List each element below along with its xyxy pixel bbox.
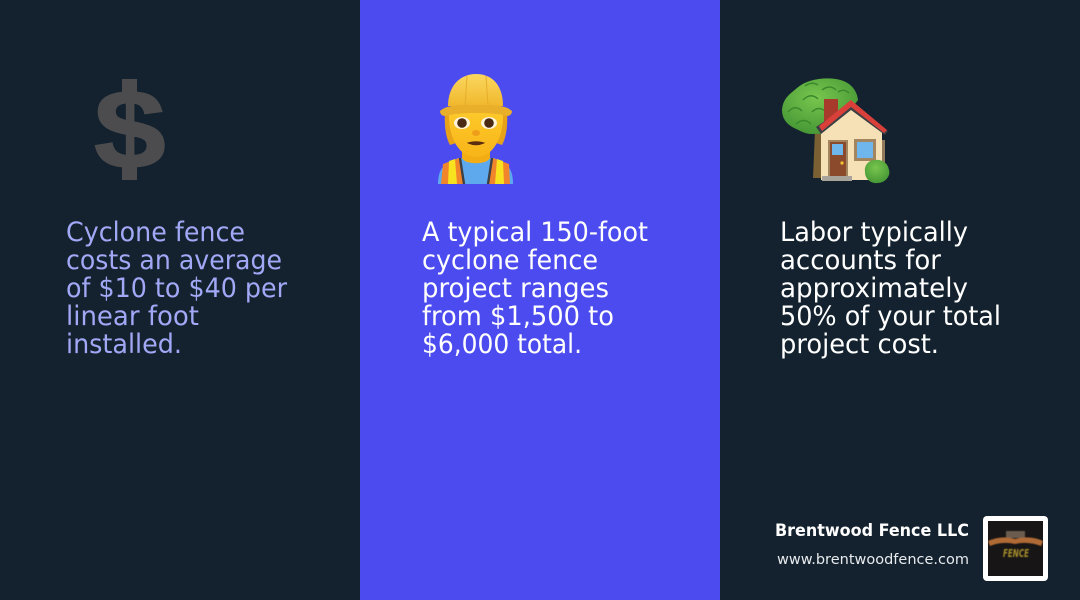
text block: average cost per foot: [66, 217, 287, 360]
worker body: [438, 158, 513, 184]
logo: FENCE: [1003, 547, 1029, 560]
door: [828, 140, 848, 177]
roof: [816, 103, 851, 134]
icon: dollar sign: $: [94, 67, 166, 192]
icon: construction worker: [438, 74, 513, 184]
logo: [983, 516, 1048, 581]
chimney: [824, 99, 838, 122]
website: www.brentwoodfence.com: [777, 552, 969, 568]
text block: project range: $6,000 total.: [422, 329, 582, 360]
text block: average cost per foot: Cyclone fence: [66, 217, 245, 248]
brand name: Brentwood Fence LLC: [775, 521, 969, 540]
text block: labor share: project cost.: [780, 329, 939, 360]
text block: project range: [422, 217, 648, 360]
house wall: [821, 107, 882, 180]
text block: labor share: accounts for: [780, 245, 941, 276]
panel: middle background: [360, 0, 720, 600]
text block: project range: cyclone fence: [422, 245, 598, 276]
bush: [865, 160, 889, 183]
text block: labor share: Labor typically: [780, 217, 968, 248]
text block: average cost per foot: installed.: [66, 329, 182, 360]
worker eyes: [454, 117, 470, 129]
steps: [822, 176, 852, 181]
tree trunk: [813, 130, 823, 178]
text block: average cost per foot: costs an average: [66, 245, 282, 276]
worker vest: [441, 158, 510, 184]
text block: project range: A typical 150-foot: [422, 217, 648, 248]
text block: average cost per foot: of $10 to $40 per: [66, 273, 287, 304]
worker nose and mouth: [472, 130, 480, 136]
worker neck: [462, 150, 490, 163]
text block: labor share: approximately: [780, 273, 968, 304]
window: [854, 139, 876, 161]
worker hair: [445, 112, 507, 145]
icon: house with tree: [782, 78, 889, 183]
text block: labor share: 50% of your total: [780, 301, 1001, 332]
tree crown: [782, 78, 858, 134]
worker helmet: [448, 74, 503, 106]
text block: average cost per foot: linear foot: [66, 301, 199, 332]
text block: project range: from $1,500 to: [422, 301, 614, 332]
text block: labor share: [780, 217, 1001, 360]
text block: project range: project ranges: [422, 273, 609, 304]
panel: left background: [0, 0, 360, 600]
worker face: [449, 112, 503, 157]
panel: right background: [720, 0, 1080, 600]
